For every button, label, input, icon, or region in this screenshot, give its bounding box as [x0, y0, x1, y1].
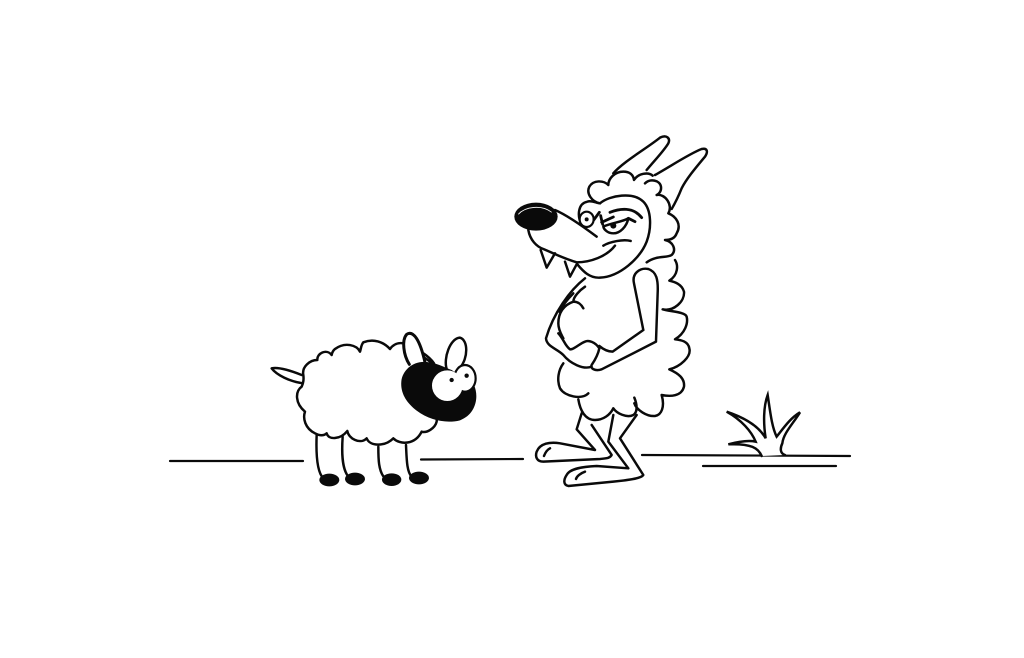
sheep far eye — [454, 365, 476, 392]
wolf brows — [594, 209, 642, 224]
sheep tail — [272, 368, 303, 383]
wolf legs and feet — [536, 413, 643, 486]
sheep near eye — [432, 370, 463, 401]
wolf — [514, 136, 707, 486]
wolf ears — [613, 136, 707, 209]
sheep — [272, 333, 476, 486]
sheep black head — [401, 362, 476, 422]
grass tuft — [727, 395, 800, 456]
sheep far ear — [446, 338, 466, 369]
wolf chest wool — [558, 287, 585, 338]
wolf nose — [514, 203, 558, 231]
wolf head — [514, 136, 707, 278]
wolf snout — [528, 210, 615, 262]
wolf right eye — [603, 218, 628, 233]
wolf face outline — [577, 195, 650, 278]
wolf arms — [546, 269, 658, 370]
ground lines — [170, 455, 850, 466]
wolf teeth — [541, 250, 577, 277]
wolf left eye — [580, 212, 594, 227]
wolf wool suit — [558, 260, 690, 420]
sheep legs — [316, 435, 412, 478]
wolf body — [536, 260, 690, 486]
sheep feet — [319, 472, 429, 486]
wolf head wool — [588, 172, 679, 262]
sheep near ear — [404, 333, 425, 364]
wolf smile — [603, 240, 631, 246]
sheep wool body — [297, 341, 440, 445]
